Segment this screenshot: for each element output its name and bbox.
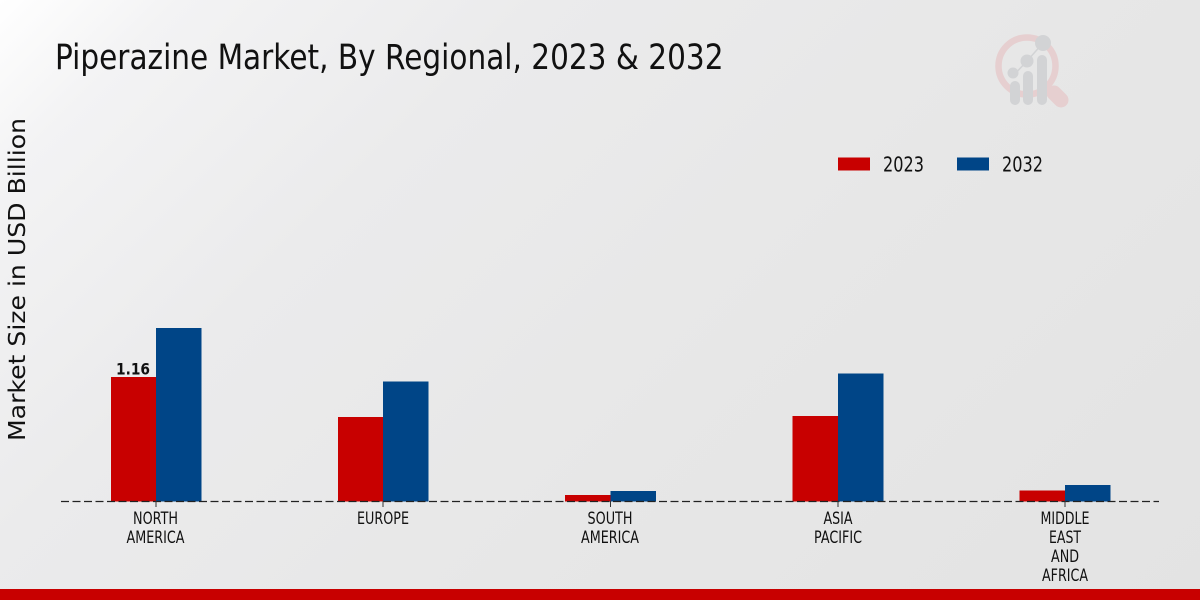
label: Middle East and Africa: AND — [1051, 547, 1079, 567]
value label: 1.16: 1.16 — [116, 360, 150, 378]
label: Middle East and Africa — [1040, 509, 1090, 586]
title: Piperazine Market, By Regional, 2023 & 2032 — [55, 38, 724, 78]
legend: 2032: 2032 — [1002, 152, 1043, 176]
watermark logo — [998, 35, 1061, 105]
label: Asia Pacific: PACIFIC — [814, 528, 862, 548]
label: Middle East and Africa: EAST — [1049, 528, 1081, 548]
label: North America: AMERICA — [126, 528, 185, 548]
legend — [838, 152, 1043, 176]
label: Middle East and Africa: MIDDLE — [1040, 509, 1090, 529]
North America bars — [111, 328, 202, 502]
label: Middle East and Africa: AFRICA — [1042, 566, 1088, 586]
legend: 2023: 2023 — [883, 152, 924, 176]
legend: 2032 — [957, 152, 1043, 176]
Middle East and Africa bars — [1020, 485, 1110, 502]
footer bar — [0, 589, 1200, 600]
x-axis category labels — [126, 509, 1090, 586]
South America bars — [565, 491, 656, 502]
legend: 2023 — [838, 152, 924, 176]
label: South America: AMERICA — [581, 528, 639, 548]
label: Asia Pacific — [814, 509, 862, 548]
label: North America — [126, 509, 185, 548]
Europe bars — [338, 382, 428, 502]
label: Europe: EUROPE — [357, 509, 409, 529]
x axis — [61, 501, 1159, 507]
label: Asia Pacific: ASIA — [824, 509, 853, 529]
Asia Pacific bars — [792, 374, 884, 502]
y-axis label: Market Size in USD Billion — [5, 118, 31, 441]
bar chart — [61, 328, 1159, 507]
label: South America: SOUTH — [588, 509, 632, 529]
label: North America: NORTH — [133, 509, 178, 529]
label: South America — [581, 509, 639, 548]
